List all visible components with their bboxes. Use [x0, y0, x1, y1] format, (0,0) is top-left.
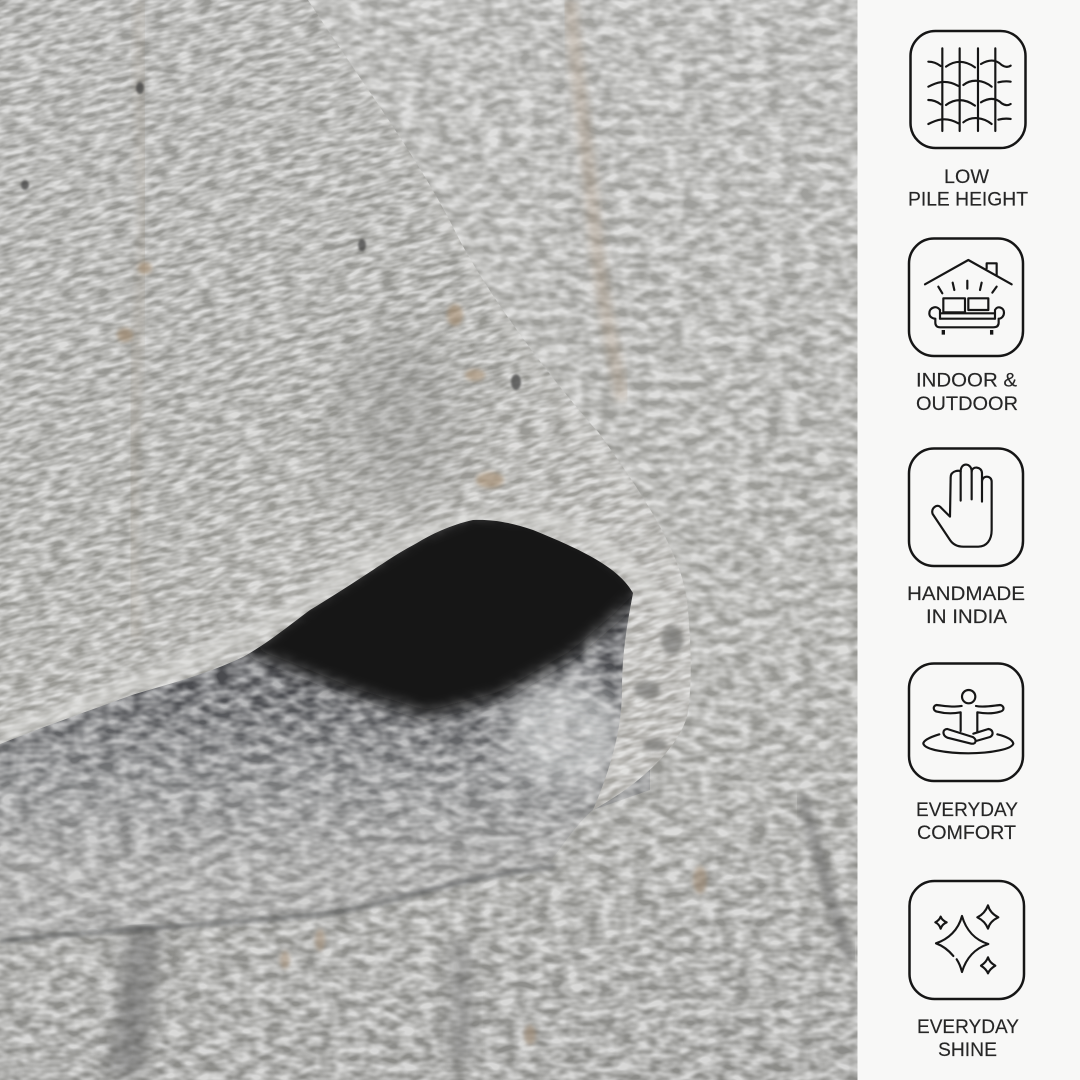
feature: low pile height [908, 31, 1028, 210]
rug background surface [0, 0, 858, 1080]
icon: house with sofa [909, 238, 1023, 356]
darker mottled zone on flap [340, 330, 460, 510]
icon: seated meditation figure [909, 664, 1023, 781]
feature: everyday shine [910, 881, 1024, 1061]
label: handmade in india: IN INDIA [926, 606, 1007, 628]
warp streaks on flap [132, 0, 144, 640]
rolled underside with dark hollow [0, 520, 650, 925]
icon: sparkles [910, 881, 1024, 999]
dark speckled streaks on floor [125, 925, 462, 1075]
label: everyday comfort: COMFORT [917, 822, 1016, 844]
label: everyday comfort: EVERYDAY [916, 799, 1018, 821]
dark marks on rim [634, 625, 683, 751]
upper flap [0, 0, 691, 810]
label: handmade in india: HANDMADE [907, 583, 1025, 605]
flap edge highlight [371, 96, 676, 575]
tan warp streak on background [570, 0, 622, 400]
dark specks on flap [21, 82, 521, 390]
lit patch beside the rim [505, 675, 625, 785]
feature: everyday comfort [909, 664, 1023, 844]
panel: rug photograph [0, 0, 858, 1080]
label: indoor and outdoor: INDOOR & [916, 370, 1017, 392]
label: low pile height: LOW [944, 166, 990, 188]
tan flecks on flap [117, 262, 504, 488]
label: low pile height: PILE HEIGHT [908, 188, 1028, 210]
dark speckled streak on lower right [802, 795, 850, 960]
label: indoor and outdoor: OUTDOOR [916, 393, 1018, 415]
feature: handmade in india [907, 448, 1025, 628]
icon: woven pile [910, 31, 1026, 148]
panel: feature column [858, 0, 1080, 1080]
label: everyday shine: EVERYDAY [917, 1016, 1019, 1038]
deep shadow inside the hollow [243, 510, 650, 716]
fold shadow line [0, 866, 555, 941]
label: everyday shine: SHINE [938, 1039, 997, 1061]
feature: indoor and outdoor [909, 238, 1023, 415]
icon: open hand [909, 448, 1023, 566]
tan flecks on floor [280, 866, 707, 1045]
